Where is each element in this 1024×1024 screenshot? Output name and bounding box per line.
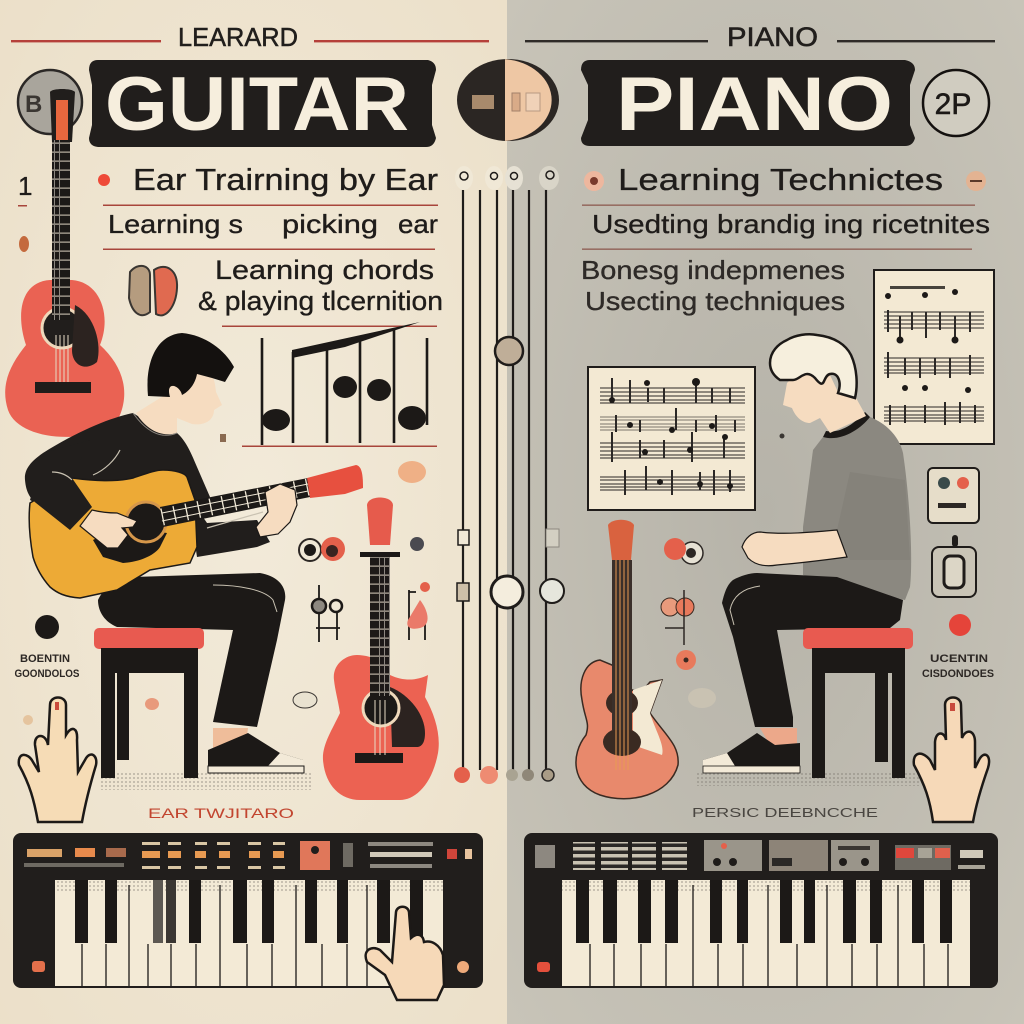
icon and caption: left note bbox=[14, 615, 80, 680]
background: right panel bbox=[507, 0, 1024, 1024]
title banner: piano: PIANO bbox=[616, 62, 893, 147]
icons: right column bbox=[928, 468, 979, 636]
text block: piano techniques bbox=[581, 162, 990, 316]
icon: side marks bbox=[18, 205, 29, 252]
guitar body bbox=[29, 470, 197, 598]
picking hand bbox=[80, 510, 137, 548]
badge: right: 2P bbox=[935, 88, 971, 121]
neck bbox=[160, 478, 310, 527]
keyboard black keys bbox=[75, 880, 423, 943]
small icons: right middle bbox=[661, 434, 784, 708]
sheet music: lower bbox=[588, 367, 755, 510]
face bbox=[136, 365, 222, 434]
text block: guitar techniques: Learning chords bbox=[215, 255, 434, 285]
text block: guitar techniques: picking bbox=[282, 209, 378, 239]
text block: piano techniques: Usedting brandig ing ricetnites bbox=[592, 209, 990, 239]
face bbox=[783, 375, 866, 433]
small icons: left middle bbox=[23, 434, 430, 725]
person: pianist bbox=[703, 334, 911, 773]
person: guitarist bbox=[25, 333, 363, 773]
icon: guitar lower left bbox=[323, 498, 439, 800]
title banner: guitar: GUITAR bbox=[105, 62, 409, 147]
sweater highlights bbox=[52, 450, 263, 528]
text block: guitar techniques bbox=[18, 162, 443, 316]
forearm bbox=[188, 495, 270, 557]
hair bbox=[770, 334, 857, 398]
collar bbox=[823, 412, 870, 438]
stool: left bbox=[94, 628, 204, 778]
caption: right note: UCENTIN bbox=[930, 653, 988, 665]
icon: guitar right bbox=[576, 520, 678, 799]
shoe and sock bbox=[208, 728, 304, 773]
hands and forearm bbox=[742, 530, 847, 566]
shoe and sock bbox=[703, 728, 800, 773]
icon: ear bbox=[129, 266, 177, 315]
keyboard: right bbox=[524, 833, 998, 988]
keyboard controls bbox=[535, 840, 985, 871]
headstock bbox=[307, 465, 363, 498]
left sleeve bbox=[25, 440, 92, 530]
legs bbox=[98, 573, 285, 727]
keyboard white keys bbox=[55, 880, 443, 986]
collar bbox=[133, 413, 177, 435]
keyboard black keys bbox=[576, 880, 952, 943]
center divider: strings bbox=[454, 166, 564, 784]
fretting hand bbox=[256, 484, 297, 537]
ground shadow: left bbox=[100, 772, 312, 790]
torso bbox=[803, 417, 911, 600]
ground shadow: right bbox=[695, 772, 920, 786]
icon and caption: left note: BOENTIN bbox=[20, 653, 70, 665]
keyboard white keys bbox=[562, 880, 970, 986]
icon: guitar top left bbox=[5, 89, 124, 437]
caption: right note: CISDONDOES bbox=[922, 668, 994, 680]
eyebrow: left: LEARARD bbox=[178, 22, 298, 52]
stool: right bbox=[803, 628, 913, 778]
hair bbox=[147, 333, 234, 397]
icon and caption: left note: GOONDOLOS bbox=[14, 668, 80, 680]
background: left panel bbox=[0, 0, 507, 1024]
eyebrow: right: PIANO bbox=[727, 22, 818, 52]
sheet music: upper bbox=[874, 270, 994, 444]
sleeve bbox=[837, 472, 910, 560]
text block: piano techniques: Bonesg indepmenes bbox=[581, 255, 845, 285]
torso bbox=[30, 413, 210, 540]
text block: guitar techniques: & playing tlcernition bbox=[198, 286, 443, 316]
icon: hand right bbox=[914, 698, 989, 822]
text block: guitar techniques: Learning s bbox=[108, 209, 243, 239]
text block: piano techniques: Learning Technictes bbox=[618, 162, 943, 197]
caption: ear training: EAR TWJITARO bbox=[148, 805, 294, 821]
icon: hand left bbox=[19, 698, 96, 822]
badge: left bbox=[18, 70, 82, 134]
badge: left: B bbox=[25, 91, 42, 118]
text block: guitar techniques: 1 bbox=[18, 171, 32, 201]
icon: hand on keys bbox=[366, 907, 444, 1000]
caption: right note bbox=[922, 653, 994, 680]
badge: right bbox=[923, 70, 989, 136]
legs bbox=[722, 573, 903, 727]
keyboard: left bbox=[13, 833, 483, 1000]
music notes: centre left bbox=[222, 322, 437, 447]
text block: guitar techniques: ear bbox=[398, 209, 438, 239]
caption: piano technique: PERSIC DEEBNCCHE bbox=[692, 805, 878, 820]
text block: guitar techniques: Ear Trairning by Ear bbox=[133, 162, 438, 197]
badge: center bbox=[457, 59, 559, 141]
keyboard controls bbox=[24, 841, 472, 870]
text block: piano techniques: Usecting techniques bbox=[585, 286, 845, 316]
